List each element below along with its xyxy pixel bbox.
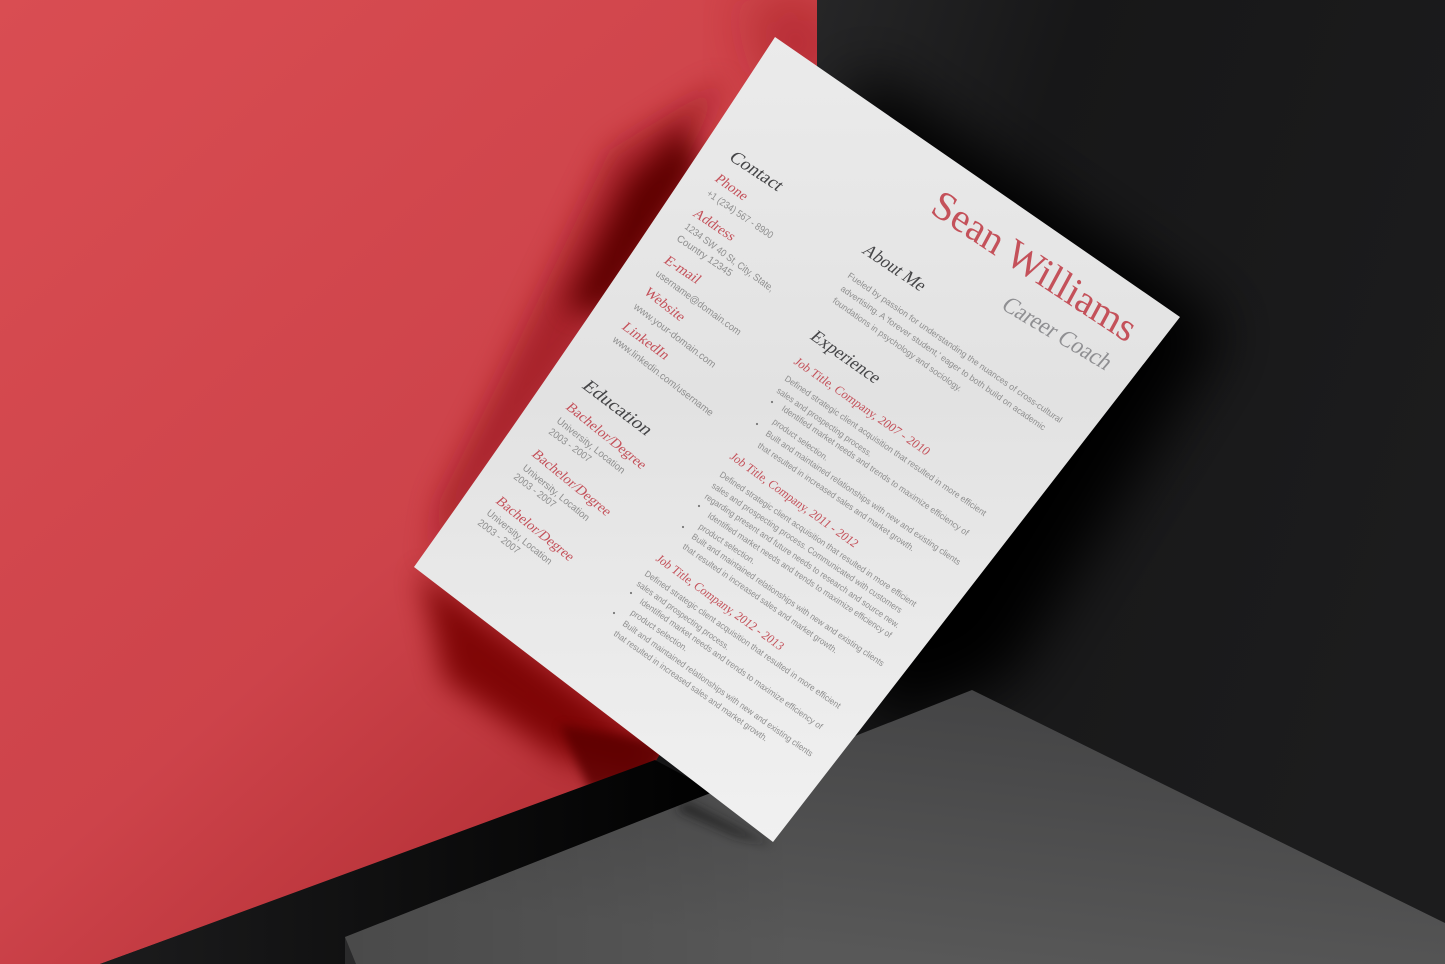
red wall xyxy=(0,0,830,964)
job entry 1: Defined strategic client acquisition that resulted in more efficient xyxy=(783,373,989,518)
job entry 1: that resulted in increased sales and market growth. xyxy=(756,440,917,553)
resume paper xyxy=(414,37,1180,842)
contact section xyxy=(609,148,789,419)
job entry 1: Job Title, Company, 2007 - 2010 xyxy=(791,355,933,458)
job entry 2: Job Title, Company, 2011 - 2012 xyxy=(727,450,862,550)
contact section: Country 12345 xyxy=(674,233,735,279)
job entry 1: Identified market needs and trends to maximize efficiency of xyxy=(780,403,971,538)
education section: University, Location xyxy=(554,416,627,476)
job entry 3: Job Title, Company, 2012 - 2013 xyxy=(653,552,787,653)
education section: 2003 - 2007 xyxy=(546,427,593,465)
contact section: www.your-domain.com xyxy=(630,301,718,371)
job entry 2: Defined strategic client acquisition that resulted in more efficient xyxy=(718,469,919,609)
education section: Bachelor/Degree xyxy=(562,400,650,472)
about me section: foundations in psychology and sociology. xyxy=(831,295,964,394)
job entry 3: product selection. xyxy=(629,607,690,653)
contact section: Contact xyxy=(725,148,789,194)
grey floor block xyxy=(345,690,1445,964)
black base band under red wall xyxy=(100,760,730,964)
contact section: www.linkedin.com/username xyxy=(609,334,716,419)
job entry 2: sales and prospecting process. Communicated with customers xyxy=(710,480,905,615)
job entry 1: sales and prospecting process. xyxy=(775,385,874,459)
job entry 3: Defined strategic client acquisition that resulted in more efficient xyxy=(643,568,843,711)
contact section: Address xyxy=(689,206,739,244)
job entry 2: regarding present and future needs to research and source new. xyxy=(703,491,902,630)
job entry 1 xyxy=(756,355,989,567)
education section: Bachelor/Degree xyxy=(492,494,578,564)
education section: Bachelor/Degree xyxy=(528,447,615,519)
education section: University, Location xyxy=(520,463,591,524)
job entry 3: Identified market needs and trends to maximize efficiency of xyxy=(638,596,825,732)
contact section: E-mail xyxy=(660,253,705,287)
contact section: LinkedIn xyxy=(618,320,673,363)
education section: Education xyxy=(578,377,658,438)
job entry 3: Built and maintained relationships with new and existing clients xyxy=(621,618,815,759)
education section: 2003 - 2007 xyxy=(511,472,558,511)
experience heading: Experience xyxy=(806,327,886,387)
name: Sean Williams xyxy=(925,180,1145,351)
contact section: username@domain.com xyxy=(653,269,743,338)
resume text xyxy=(475,148,1145,759)
contact section: Website xyxy=(640,285,689,324)
about me section: Fueled by passion for understanding the nuances of cross-cultural xyxy=(846,270,1064,425)
job entry 3 xyxy=(612,552,843,759)
contact section: 1234 SW 40 St, City, State, xyxy=(682,222,776,295)
job entry 2: Identified market needs and trends to maximize efficiency of xyxy=(706,510,894,640)
education section xyxy=(475,377,658,567)
about me section: advertising. A 'forever student,' eager to both build on academic xyxy=(839,283,1048,433)
job entry 1: product selection. xyxy=(771,416,830,463)
job entry 2: Built and maintained relationships with new and existing clients xyxy=(690,531,887,669)
education section: 2003 - 2007 xyxy=(475,518,522,557)
job role: Career Coach xyxy=(996,292,1119,375)
contact section: Phone xyxy=(711,172,752,204)
job entry 1: Built and maintained relationships with new and existing clients xyxy=(764,428,963,567)
job entry 2 xyxy=(681,450,919,669)
paper sheet xyxy=(414,37,1180,842)
about me section: About Me xyxy=(858,241,932,294)
job entry 2: that resulted in increased sales and market growth. xyxy=(681,541,840,655)
job entry 3: sales and prospecting process. xyxy=(635,579,732,652)
contact section: +1 (234) 567 - 8900 xyxy=(704,188,775,242)
education section: University, Location xyxy=(484,508,554,567)
job entry 2: product selection. xyxy=(697,521,757,566)
black wall xyxy=(780,0,1445,964)
job entry 3: that resulted in increased sales and market growth. xyxy=(612,628,770,743)
